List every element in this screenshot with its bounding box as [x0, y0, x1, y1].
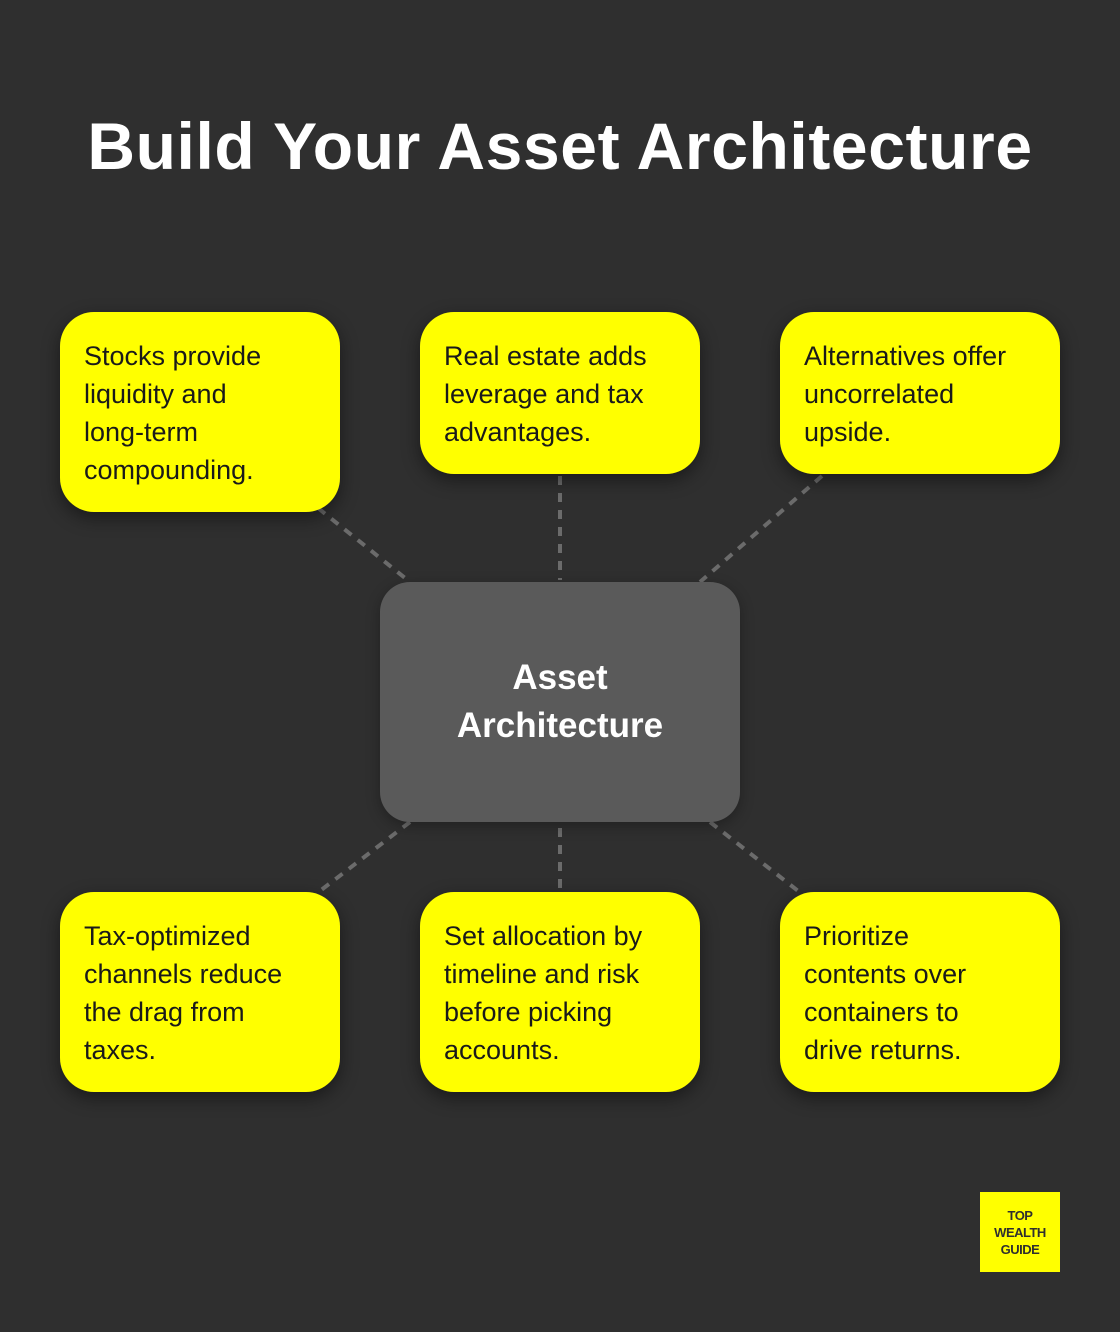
box: prioritize: Prioritize [804, 921, 909, 951]
box: real estate: advantages. [444, 417, 591, 447]
box: allocation: accounts. [444, 1035, 560, 1065]
logo: TOP [1007, 1208, 1032, 1222]
box: prioritize: drive returns. [804, 1035, 962, 1065]
center box: Asset [512, 658, 608, 697]
box: tax-optimized: Tax-optimized [84, 921, 251, 951]
box: stocks: liquidity and [84, 379, 227, 409]
box: alternatives: Alternatives offer [804, 341, 1006, 371]
box: real estate: leverage and tax [444, 379, 644, 409]
box: prioritize: containers to [804, 997, 959, 1027]
logo [980, 1192, 1060, 1272]
box: real estate [420, 312, 700, 474]
box: tax-optimized: channels reduce [84, 959, 282, 989]
box: stocks [60, 312, 340, 512]
center box [380, 582, 740, 822]
box: tax-optimized: the drag from [84, 997, 245, 1027]
box: alternatives [780, 312, 1060, 474]
box: stocks: compounding. [84, 455, 254, 485]
box: prioritize [780, 892, 1060, 1092]
box: allocation: timeline and risk [444, 959, 639, 989]
box: stocks: Stocks provide [84, 341, 261, 371]
box: alternatives: upside. [804, 417, 891, 447]
box: real estate: Real estate adds [444, 341, 647, 371]
logo: GUIDE [1001, 1242, 1039, 1256]
box: tax-optimized [60, 892, 340, 1092]
box: allocation: Set allocation by [444, 921, 642, 951]
title: Build Your Asset Architecture [87, 109, 1033, 183]
box: alternatives: uncorrelated [804, 379, 954, 409]
logo: WEALTH [994, 1224, 1046, 1240]
box: tax-optimized: taxes. [84, 1035, 156, 1065]
box: prioritize: contents over [804, 959, 966, 989]
box: allocation [420, 892, 700, 1092]
box: allocation: before picking [444, 997, 612, 1027]
center box: Architecture [457, 706, 663, 745]
box: stocks: long-term [84, 417, 198, 447]
